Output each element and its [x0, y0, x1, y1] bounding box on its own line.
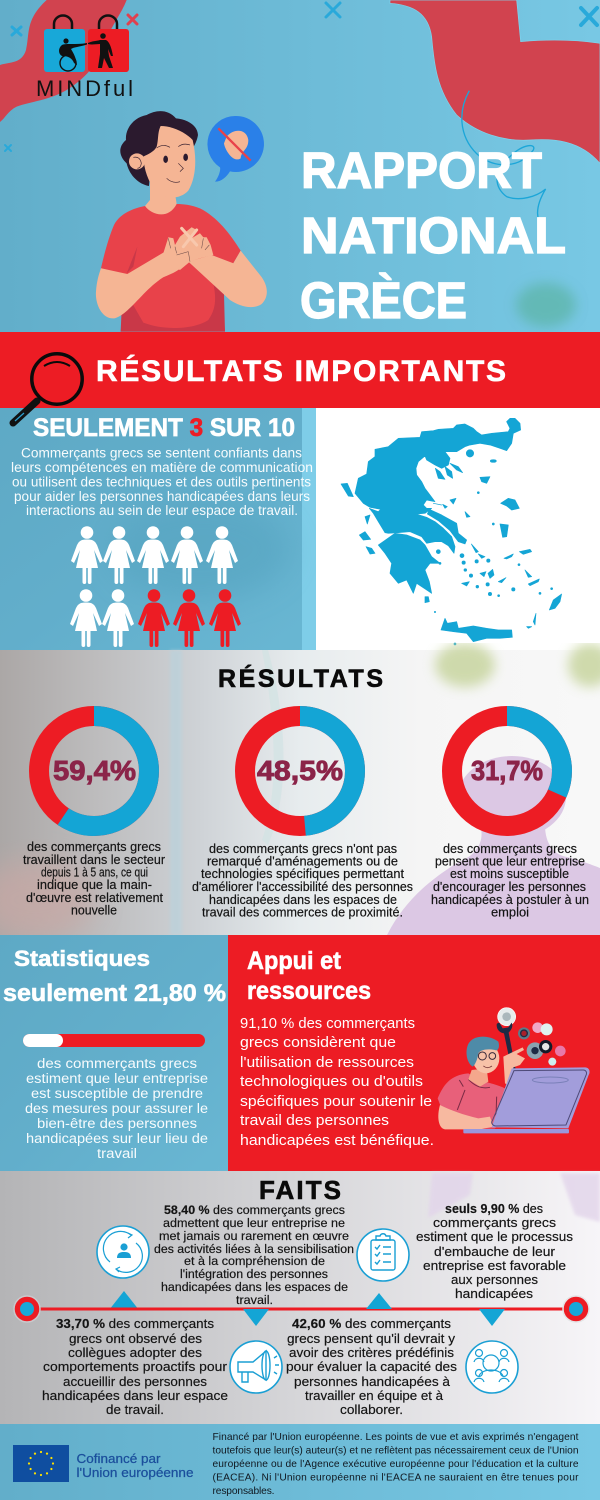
illustration: man with laptop and tools [438, 1008, 590, 1133]
donut: 48,5% [245, 716, 355, 826]
donut: 31,7%: 31,7% [471, 755, 543, 786]
text block: est susceptible de prendre [31, 1086, 203, 1101]
neck [145, 180, 177, 217]
fact: 42,60 %: grecs pensent qu'il devrait y [287, 1331, 455, 1346]
text block: travail des personnes [240, 1113, 389, 1129]
donut: 31,7% [452, 716, 562, 826]
text block: des mesures pour assurer le [25, 1101, 208, 1116]
disclaimer: toutefois que leur(s) auteur(s) et ne reflètent pas nécessairement ceux de l'Union [212, 1446, 578, 1456]
caption: 31,7%: des commerçants grecs [443, 842, 577, 856]
fact: 58,40 %: 58,40 % des commerçants grecs [164, 1203, 345, 1217]
icon: person with cycle arrows [97, 1226, 149, 1278]
gears [498, 1008, 516, 1026]
fact: 33,70 %: de travail. [106, 1402, 164, 1417]
panel: faits [0, 1171, 600, 1424]
fact: 9,90 %: commerçants grecs [433, 1215, 556, 1230]
panel: statistiques [0, 935, 228, 1171]
neck and head [468, 1068, 488, 1087]
icon: EU flag [13, 1445, 69, 1482]
banner: résultats importants: RÉSULTATS IMPORTANTS [96, 354, 506, 388]
text block: pour aider les personnes handicapées dans leurs [14, 489, 310, 504]
caption: 48,5%: technologies spécifiques permettant [201, 867, 405, 881]
caption: 31,7%: est moins susceptible [450, 867, 569, 881]
text block [25, 1056, 208, 1161]
text block [11, 446, 313, 518]
fact: 33,70 %: handicapées dans leur espace [42, 1388, 228, 1403]
donut: 59,4% [39, 716, 149, 826]
pictogram: people 3 of 10 [70, 526, 241, 647]
panel: hero [0, 0, 600, 332]
icon: crosses [5, 3, 597, 151]
disclaimer: (EACEA). Ni l'Union européenne ni l'EACEA ne sauraient en être tenues pour [212, 1472, 579, 1484]
icon: magnifying glass [13, 354, 82, 423]
fact: 33,70 %: collègues adopter des [68, 1345, 202, 1360]
caption: 31,7%: pensent que leur entreprise [435, 854, 585, 868]
caption: 31,7%: emploi [491, 906, 529, 920]
Peloponnese [378, 533, 440, 593]
heading: Appui et [247, 947, 342, 975]
disclaimer [212, 1432, 579, 1497]
blue curvy line [462, 91, 546, 233]
red shape top right [390, 0, 600, 163]
title: GRÈCE [300, 272, 467, 329]
logo: MINDful [36, 16, 133, 101]
text block: l'utilisation de ressources [240, 1055, 414, 1071]
panel: résultats [0, 643, 600, 940]
caption: 31,7%: handicapées à postuler à un [431, 893, 589, 907]
text block: ou utilisent des techniques et des outils pertinents [12, 474, 311, 490]
fact: 58,40 %: met jamais ou rarement en œuvre [159, 1229, 349, 1243]
fact: 42,60 % [286, 1316, 457, 1417]
facial features [163, 156, 168, 163]
logo: MINDful: MINDful [36, 76, 133, 101]
text block: Commerçants grecs se sentent confiants dans [21, 446, 302, 460]
caption: 48,5%: remarqué d'aménagements ou de [207, 854, 398, 868]
text block [240, 1016, 434, 1149]
green blur [516, 283, 576, 327]
glasses [478, 1052, 496, 1060]
co-funded label: l'Union européenne [76, 1465, 194, 1480]
caption: 48,5%: des commerçants grecs n'ont pas [209, 842, 397, 856]
panel: footer [0, 1424, 600, 1500]
caption: 59,4%: indique que la main- [37, 878, 152, 892]
heading: Statistiques [14, 946, 150, 971]
red shape top left [0, 0, 127, 122]
disclaimer: européenne ou de l'Agence exécutive européenne pour l'éducation et la culture [212, 1459, 579, 1470]
text block: 91,10 % des commerçants [240, 1016, 415, 1032]
heading: seulement 21,80 % [3, 980, 226, 1007]
fact: 58,40 %: travail. [236, 1293, 273, 1307]
caption: 31,7%: d'encourager les personnes [433, 880, 586, 894]
icon: people network [466, 1341, 518, 1393]
fact: 58,40 % [154, 1203, 354, 1307]
heading: FAITS [259, 1175, 341, 1205]
bubble no-hearing [207, 116, 264, 182]
illustration: person signing [96, 111, 267, 332]
fact: 33,70 %: grecs ont observé des [69, 1331, 202, 1346]
fact: 9,90 %: handicapées [455, 1286, 533, 1301]
donut: 48,5%: 48,5% [257, 755, 343, 786]
caption: 59,4%: depuis 1 à 5 ans, ce qui [41, 866, 148, 880]
fact: 42,60 %: collaborer. [340, 1402, 403, 1417]
mainland [355, 418, 521, 553]
fact: 58,40 %: des activités liées à la sensibilisation [154, 1242, 354, 1256]
shirt [101, 204, 241, 332]
caption: 59,4%: des commerçants grecs [27, 840, 161, 854]
text block: bien-être des personnes [37, 1116, 197, 1131]
fact: 33,70 %: comportements proactifs pour [43, 1359, 228, 1374]
fact: 9,90 %: aux personnes [451, 1272, 538, 1287]
laptop [463, 1129, 569, 1133]
fact: 58,40 %: et à la compréhension de [184, 1254, 325, 1268]
title: NATIONAL [301, 207, 566, 264]
lower arm [438, 1105, 493, 1129]
icon: clipboard checklist [357, 1229, 409, 1281]
co-funded label [76, 1451, 194, 1480]
panel: map of Greece [316, 408, 600, 650]
banner: résultats importants [0, 332, 600, 408]
panel: seulement 3 sur 10 [0, 408, 316, 650]
caption: 59,4% [23, 840, 165, 918]
text block: spécifiques pour soutenir le [240, 1094, 432, 1110]
arm right [188, 251, 267, 307]
fact: 9,90 % [416, 1201, 573, 1301]
fact: 42,60 %: 42,60 % des commerçants [292, 1316, 451, 1331]
Euboea [427, 509, 467, 544]
text block: des commerçants grecs [37, 1056, 197, 1071]
fact: 33,70 %: accueillir des personnes [63, 1374, 207, 1389]
text block: technologiques ou d'outils [240, 1074, 423, 1090]
hair [467, 1037, 499, 1067]
co-funded label: Cofinancé par [76, 1451, 161, 1466]
face [143, 126, 195, 198]
panel: appui et ressources [228, 935, 600, 1171]
text block: handicapées sur leur lieu de [26, 1131, 208, 1146]
text block: interactions au sein de leur espace de travail. [26, 503, 298, 518]
wrench [497, 1023, 516, 1070]
caption: 59,4%: nouvelle [71, 904, 117, 918]
heading: RÉSULTATS [218, 664, 383, 693]
fact: 42,60 %: travailler en équipe et à [305, 1388, 444, 1403]
fact: 33,70 %: 33,70 % des commerçants [56, 1316, 214, 1331]
fact: 58,40 %: l'intégration des personnes [180, 1267, 328, 1281]
progress bar [23, 1034, 205, 1047]
heading: ressources [247, 977, 371, 1005]
caption: 48,5%: travail des commerces de proximité. [202, 906, 403, 920]
fact: 9,90 %: d'embauche de leur [434, 1244, 556, 1259]
caption: 31,7% [431, 842, 589, 920]
fact: 58,40 %: handicapées dans les espaces de [161, 1280, 348, 1294]
heading [3, 946, 226, 1007]
donut: 59,4%: 59,4% [53, 755, 136, 786]
text block: travail [97, 1146, 137, 1161]
timeline [14, 1291, 589, 1326]
disclaimer: Financé par l'Union européenne. Les points de vue et avis exprimés n'engagent [212, 1432, 579, 1443]
fact: 58,40 %: admettent que leur entreprise ne [163, 1216, 345, 1230]
text block: grecs considèrent que [240, 1035, 396, 1051]
hair back [120, 111, 198, 186]
fact: 42,60 %: personnes handicapées à [294, 1374, 451, 1389]
caption: 59,4%: travaillent dans le secteur [23, 853, 165, 867]
shirt [438, 1073, 507, 1129]
islands [549, 594, 562, 610]
heading [247, 947, 371, 1005]
arm left [96, 252, 187, 318]
Crete [441, 618, 512, 642]
text block: estiment que leur entreprise [26, 1071, 208, 1086]
caption: 48,5%: handicapées dans les espaces de [209, 893, 397, 907]
fact: 42,60 %: avoir des critères prédéfinis [289, 1345, 454, 1360]
disclaimer: responsables. [212, 1486, 274, 1497]
text block: handicapées est bénéfique. [240, 1133, 434, 1149]
fact: 9,90 %: estiment que le processus [416, 1229, 573, 1244]
title [300, 142, 566, 329]
fact: 9,90 %: seuls 9,90 % des [445, 1201, 543, 1216]
caption: 48,5% [192, 842, 413, 920]
caption: 48,5%: d'améliorer l'accessibilité des personnes [192, 880, 413, 894]
icon: megaphone [230, 1341, 282, 1393]
caption: 59,4%: d'œuvre est relativement [26, 891, 164, 905]
heading: SEULEMENT 3 SUR 10 [33, 414, 295, 442]
fact: 33,70 % [42, 1316, 228, 1417]
text block: leurs compétences en matière de communication [11, 460, 313, 475]
fact: 9,90 %: entreprise est favorable [423, 1258, 566, 1273]
hands [163, 227, 213, 270]
title: RAPPORT [301, 142, 542, 199]
fact: 42,60 %: pour évaluer la capacité des [286, 1359, 457, 1374]
ear [129, 153, 145, 169]
raised arm [503, 1047, 525, 1087]
